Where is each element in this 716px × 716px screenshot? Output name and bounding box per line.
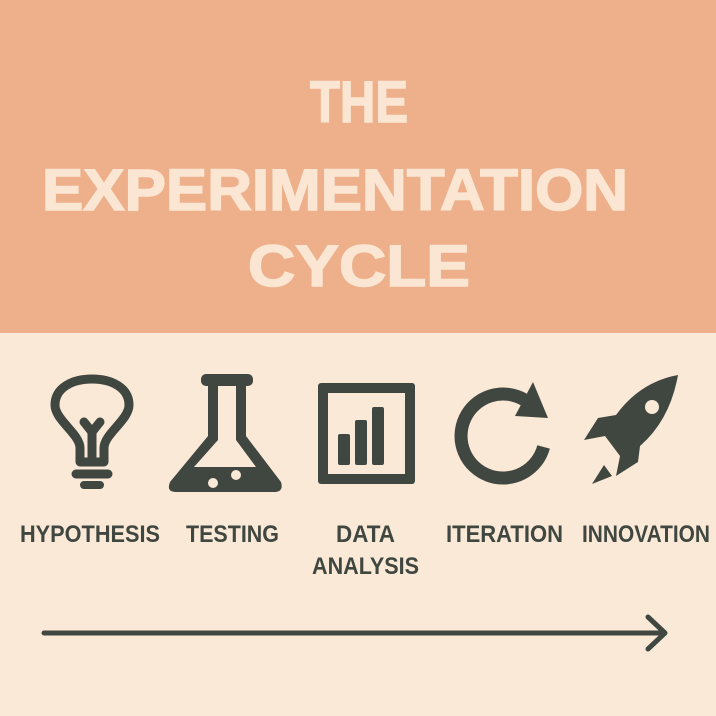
labels: DATA <box>336 521 395 548</box>
title: THE <box>310 70 408 135</box>
icon: flask <box>169 374 282 492</box>
title: EXPERIMENTATION <box>42 158 628 223</box>
title: CYCLE <box>248 234 470 299</box>
icon: refresh arrow <box>461 382 548 478</box>
icon: lightbulb <box>55 379 129 485</box>
labels <box>20 521 710 580</box>
header panel <box>0 0 716 333</box>
labels: TESTING <box>186 521 279 548</box>
labels: HYPOTHESIS <box>20 521 160 548</box>
labels: ITERATION <box>446 521 563 548</box>
icon: data chart <box>318 383 415 484</box>
icon: rocket <box>584 375 678 484</box>
arrow <box>44 617 665 649</box>
title <box>42 70 628 299</box>
labels: ANALYSIS <box>312 553 419 580</box>
